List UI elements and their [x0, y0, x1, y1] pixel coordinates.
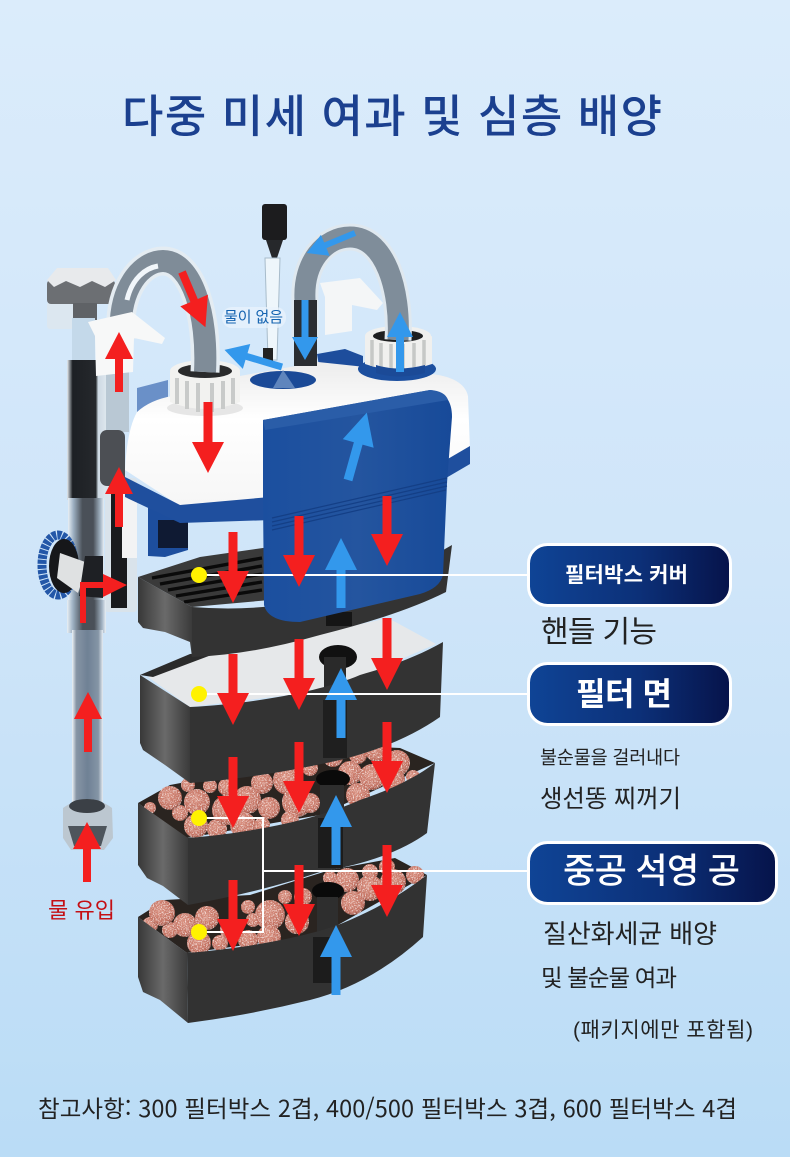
arrow: tray three left — [217, 757, 249, 828]
center tube — [319, 645, 357, 702]
filter product illustration — [42, 204, 528, 1023]
air valve knob and clear tube — [262, 204, 287, 362]
blue support foot — [148, 505, 188, 557]
red water flow arrows — [73, 266, 403, 951]
arrow: tray two left — [217, 654, 249, 725]
intake strainer — [63, 799, 113, 850]
arrow: right arch — [302, 223, 359, 264]
arrow: left arch — [168, 266, 219, 333]
white shell — [125, 362, 470, 506]
impeller head — [47, 268, 116, 329]
support strip — [122, 490, 137, 558]
arrow: toward air port — [221, 337, 286, 379]
lid blue tab — [317, 349, 363, 372]
secondary tube — [100, 372, 137, 612]
tray interior — [138, 858, 427, 953]
callout: filter box cover: 필터박스 커버 — [565, 564, 688, 587]
ceramic balls — [142, 859, 424, 955]
arrow: inlet down — [292, 300, 318, 360]
ceramic balls — [144, 738, 420, 839]
arrow: pipe L-bend right — [80, 574, 127, 623]
rear blue piece — [137, 380, 168, 425]
stem — [317, 897, 338, 939]
tube coupler — [67, 600, 106, 633]
black inner tube — [67, 360, 107, 500]
blue filter box cover — [263, 390, 452, 622]
top grated tray — [138, 545, 452, 657]
center blue port — [250, 370, 316, 389]
stem — [320, 785, 344, 825]
arrow: tray four center — [283, 865, 315, 936]
blue band right — [446, 446, 470, 478]
tray rim — [140, 651, 222, 677]
tray shell — [138, 875, 427, 1023]
second tray with filter wool — [140, 618, 443, 783]
right water pipe arch — [294, 237, 398, 366]
center tube hole — [312, 882, 344, 900]
callout: hollow quartz balls — [528, 842, 776, 904]
arrow: clip up — [105, 332, 133, 392]
text: handle function: 핸들 기능 — [541, 616, 657, 649]
white filter wool — [148, 618, 436, 707]
arrow: tray one center — [283, 516, 315, 587]
arrow: tray four right — [371, 845, 403, 917]
left water pipe arch — [121, 261, 205, 372]
text: package note: (패키지에만 포함됨) — [573, 1019, 753, 1042]
arrow: tray three center — [283, 742, 315, 813]
tray interior — [138, 745, 435, 838]
water inlet label: 물 유입 — [48, 898, 115, 923]
text: nitrifying bacteria culture: 질산화세균 배양 — [543, 919, 717, 949]
arrow: tray one right — [371, 496, 403, 566]
text: and impurity filtering: 및 불순물 여과 — [541, 965, 677, 991]
arrow: cover diagonal up — [333, 408, 382, 484]
right threaded nut front — [365, 336, 432, 376]
right arch: inlet tube base — [294, 300, 317, 366]
arrow: tube up — [74, 692, 102, 752]
text: fish waste: 생선똥 찌꺼기 — [540, 785, 681, 813]
black grate — [138, 547, 270, 607]
arrow: cover bottom up — [325, 538, 357, 608]
long clear intake tube — [72, 630, 103, 802]
left white clip — [88, 312, 165, 376]
yellow marker dots — [191, 567, 207, 940]
upper clear tube section — [72, 318, 95, 360]
blue gear wheel — [42, 535, 103, 598]
blue base band — [125, 477, 272, 523]
right threaded nut back — [358, 326, 436, 381]
bottom tray with ceramic media — [138, 858, 427, 1023]
arrow: body down — [192, 402, 224, 473]
text: filter impurities: 불순물을 걸러내다 — [540, 747, 680, 768]
arrow: pipe up — [105, 467, 133, 527]
arrow: right nut up — [387, 312, 413, 372]
arrow: strainer up — [73, 822, 101, 882]
arrow: tray two up — [325, 668, 357, 738]
footer note: 참고사항: 300 필터박스 2겹, 400/500 필터박스 3겹, 600 필터박스 4겹 — [38, 1090, 737, 1124]
arrow: tray two right — [371, 618, 403, 690]
title: 다중 미세 여과 및 심층 배양 — [122, 91, 662, 142]
arrow: tray three right — [371, 722, 403, 793]
blue water flow arrows — [221, 223, 413, 995]
tray shell — [140, 642, 443, 783]
callout leader lines — [199, 575, 528, 932]
left pump and intake tubes — [42, 268, 137, 850]
left threaded nut front — [170, 372, 240, 412]
right white clip — [320, 278, 383, 335]
tray shell — [138, 763, 435, 905]
callout: filter wool — [528, 664, 730, 724]
center tube hole — [316, 770, 350, 788]
tray shell — [138, 545, 452, 657]
arrow: tray three up — [320, 795, 352, 865]
arrow: tray two center — [283, 639, 315, 710]
main white housing — [122, 349, 470, 558]
third tray with ceramic media — [138, 738, 435, 905]
callout: filter wool: 필터 면 — [576, 676, 672, 712]
callout: hollow quartz balls: 중공 석영 공 — [563, 852, 740, 891]
arrow: tray four left — [217, 880, 249, 951]
label text: no water: 물이 없음 — [224, 309, 283, 326]
arrow: tray one left — [217, 532, 249, 603]
left threaded nut back — [167, 360, 243, 416]
arrow: tray four up — [320, 925, 352, 995]
lower tinted tube — [68, 498, 104, 602]
callout: filter box cover — [528, 544, 730, 606]
